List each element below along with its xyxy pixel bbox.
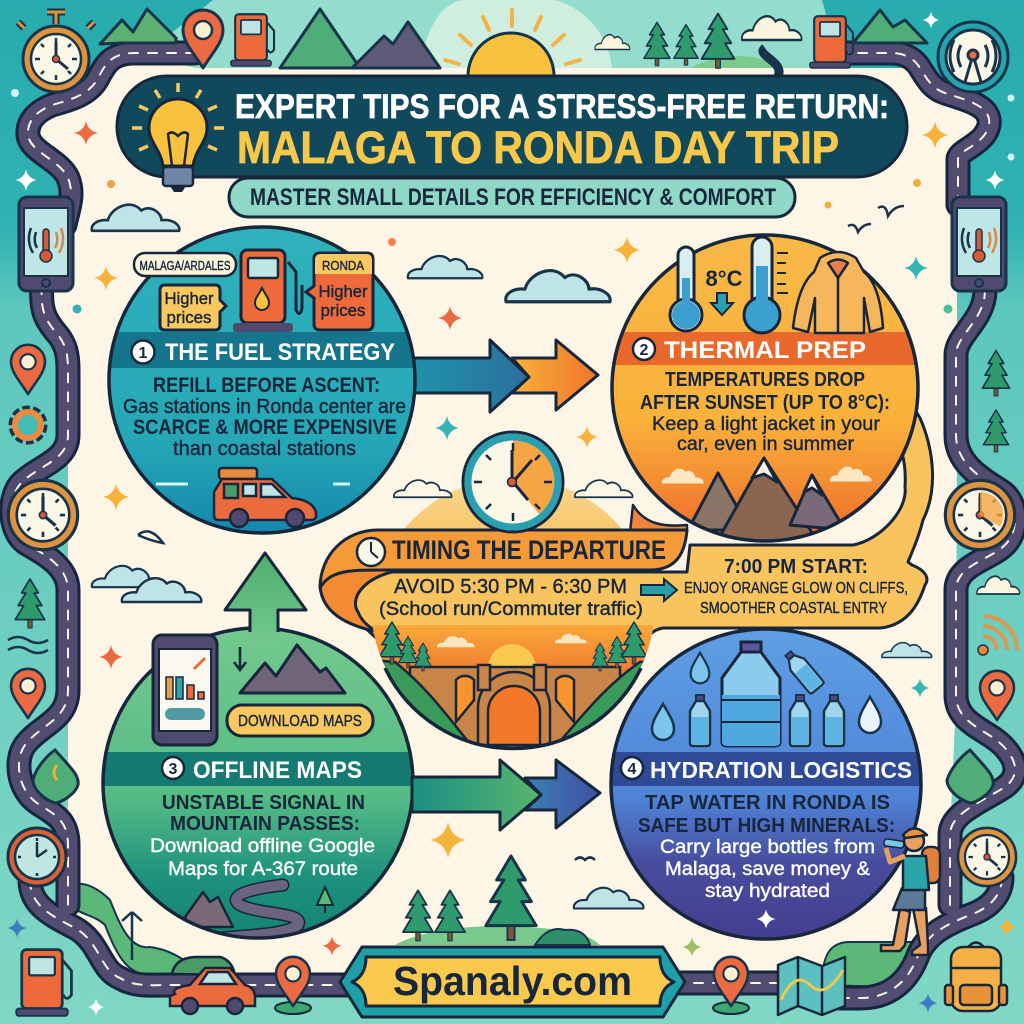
arrows: maps to hydration bbox=[412, 760, 600, 830]
icon: pin left lower bbox=[11, 669, 45, 718]
icon: clock right bbox=[945, 480, 1015, 550]
body text: car, even in summer bbox=[677, 434, 855, 455]
icon: small bottles and tilted bottle bbox=[690, 648, 844, 746]
download maps pill: DOWNLOAD MAPS bbox=[238, 713, 362, 730]
sky clouds bbox=[662, 467, 872, 484]
body text: REFILL BEFORE ASCENT: bbox=[153, 374, 380, 397]
body text bbox=[640, 369, 890, 455]
icon: large water jug bbox=[722, 642, 780, 746]
title banner bbox=[117, 76, 907, 192]
body text: TEMPERATURES DROP bbox=[665, 369, 865, 391]
mountains bbox=[688, 458, 845, 545]
start text: 7:00 PM START: bbox=[724, 556, 868, 578]
icon: waves left bbox=[8, 637, 48, 653]
body text: SAFE BUT HIGH MINERALS: bbox=[638, 815, 895, 837]
body text: TAP WATER IN RONDA IS bbox=[645, 792, 890, 814]
icon: clouds beside clock bbox=[394, 480, 633, 497]
clouds in scene bbox=[437, 634, 587, 647]
hiker bbox=[881, 828, 940, 955]
section band bbox=[90, 752, 430, 786]
icon: water drops bbox=[652, 653, 881, 740]
callout: Ronda higher prices: RONDA bbox=[322, 258, 364, 273]
icon: mountains top left bbox=[100, 9, 440, 68]
arrow bbox=[641, 579, 677, 601]
subtitle pill bbox=[229, 178, 795, 217]
icon: sun bbox=[445, 10, 580, 76]
icon: clock lower left bbox=[8, 828, 66, 886]
icon: stopwatch top left bbox=[18, 12, 94, 92]
body text: Gas stations in Ronda center are bbox=[123, 396, 406, 418]
icon: light bulb bbox=[132, 83, 224, 192]
icon: top trees bbox=[644, 14, 734, 68]
icon: signal tower bbox=[938, 22, 1008, 92]
icon: winding road bbox=[222, 885, 299, 938]
sun backdrop bbox=[371, 478, 655, 620]
body text: MOUNTAIN PASSES: bbox=[170, 813, 360, 835]
hiker legs bbox=[881, 908, 928, 955]
icon: fuel pump top left bbox=[231, 14, 274, 66]
arrows: fuel to thermal bbox=[410, 340, 598, 412]
download maps pill bbox=[227, 705, 373, 736]
icon: Ronda bridge bbox=[410, 665, 620, 749]
label: Malaga/Ardales bbox=[134, 253, 236, 276]
heading ribbon bbox=[320, 530, 687, 588]
icon: green hill behind trees bbox=[690, 56, 778, 68]
label: Malaga/Ardales: MALAGA/ARDALES bbox=[140, 258, 231, 273]
wind streaks bbox=[156, 482, 350, 486]
body text: stay hydrated bbox=[705, 881, 830, 902]
icon: bottom pin left bbox=[275, 957, 311, 1014]
icon: folded map bbox=[778, 957, 845, 1015]
number badge 3: 3 bbox=[169, 761, 178, 778]
icon: signal arcs right bbox=[978, 616, 1017, 655]
avoid text: AVOID 5:30 PM - 6:30 PM bbox=[394, 576, 627, 598]
arrow up to timing bbox=[225, 553, 306, 645]
number badge 4: 4 bbox=[628, 761, 637, 778]
title line 2: MALAGA TO RONDA DAY TRIP bbox=[237, 122, 839, 173]
icon: pin right bbox=[980, 671, 1014, 720]
trees bbox=[379, 622, 647, 671]
icon: gear left bbox=[12, 409, 44, 441]
brand banner bbox=[340, 947, 685, 1017]
scene lower outline bbox=[385, 668, 641, 749]
icon: phone with chart bbox=[153, 635, 217, 745]
callout: lower higher prices: Higher bbox=[164, 289, 214, 308]
number badge 2: 2 bbox=[640, 342, 649, 359]
icon: small clock bbox=[357, 538, 385, 566]
icon: small tree bbox=[317, 887, 333, 913]
panel: fuel strategy bbox=[100, 227, 430, 533]
heading ribbon curl bbox=[630, 505, 687, 532]
body text bbox=[150, 792, 375, 880]
8 degrees label: 8°C bbox=[706, 266, 743, 291]
hiker backpack bbox=[922, 847, 940, 883]
icon: large clock bbox=[463, 432, 563, 532]
icon: thermometers bbox=[670, 237, 788, 333]
body text: UNSTABLE SIGNAL IN bbox=[162, 792, 365, 814]
callout: Ronda higher prices bbox=[306, 253, 373, 330]
icon: hill left bbox=[33, 750, 78, 803]
icon: clock lower right bbox=[958, 828, 1016, 886]
icon: hill right bbox=[947, 750, 993, 803]
icon: map pin top bbox=[183, 10, 223, 68]
body text: Download offline Google bbox=[150, 836, 375, 857]
panel: hydration logistics bbox=[600, 629, 940, 939]
callout: lower higher prices: prices bbox=[166, 308, 212, 327]
number badge 2 bbox=[633, 338, 655, 360]
body text: Malaga, save money & bbox=[665, 859, 870, 880]
body text bbox=[123, 374, 406, 460]
icon: bottom pin right bbox=[713, 957, 749, 1014]
sun glow bbox=[420, 0, 612, 70]
number badge 1 bbox=[132, 340, 154, 364]
top border icons bbox=[100, 9, 1008, 92]
icon: pin left upper bbox=[11, 345, 45, 394]
icon: trees right bbox=[982, 350, 1010, 452]
wind turbine bbox=[122, 912, 142, 960]
icon: cloud right bbox=[977, 576, 1020, 594]
body text: SCARCE & MORE EXPENSIVE bbox=[133, 416, 397, 439]
body text: Keep a light jacket in your bbox=[652, 414, 881, 435]
icon: bottom car bbox=[170, 957, 255, 1014]
subtitle pill: MASTER SMALL DETAILS FOR EFFICIENCY & COMFORT bbox=[250, 184, 776, 211]
icon: jacket bbox=[793, 252, 883, 333]
avoid text: (School run/Commuter traffic) bbox=[379, 599, 643, 620]
body text: AFTER SUNSET (UP TO 8°C): bbox=[640, 392, 890, 414]
icon: clock left bbox=[8, 480, 78, 550]
section band bbox=[600, 752, 940, 786]
icon: fuel pump top right bbox=[810, 16, 853, 68]
panel: timing the departure bbox=[320, 405, 933, 755]
body text: than coastal stations bbox=[173, 438, 356, 460]
body text: Maps for A-367 route bbox=[168, 859, 358, 880]
body text: Carry large bottles from bbox=[660, 837, 875, 858]
heading: HYDRATION LOGISTICS bbox=[650, 757, 912, 783]
icon: phone right bbox=[952, 197, 1006, 291]
bottom scene: trees and hill bbox=[395, 856, 600, 945]
icon: small top clouds bbox=[595, 16, 802, 49]
yellow ribbon with swoosh tail bbox=[339, 405, 933, 650]
heading: TIMING THE DEPARTURE bbox=[392, 535, 666, 565]
top sky background bbox=[125, 0, 842, 70]
icon: backpack bbox=[945, 942, 1007, 1011]
8 degrees label bbox=[706, 266, 743, 315]
green cliffs bbox=[382, 660, 644, 740]
heading: THE FUEL STRATEGY bbox=[165, 339, 395, 366]
hill bottom left bbox=[70, 884, 205, 975]
number badge 3 bbox=[162, 757, 184, 779]
icon: red car bbox=[214, 468, 316, 527]
avoid text bbox=[379, 576, 643, 620]
body text bbox=[638, 792, 895, 902]
section band bbox=[600, 332, 930, 365]
start text: SMOOTHER COASTAL ENTRY bbox=[700, 600, 887, 617]
panel: thermal prep bbox=[600, 235, 930, 545]
icon: bottom fuel pump bbox=[16, 950, 71, 1016]
bridge scene bbox=[370, 622, 660, 755]
icon: small down arrow bbox=[234, 647, 246, 670]
icon: mountain bbox=[240, 645, 345, 693]
heading: OFFLINE MAPS bbox=[193, 757, 362, 784]
number badge 4 bbox=[621, 757, 643, 779]
start text: ENJOY ORANGE GLOW ON CLIFFS, bbox=[684, 580, 908, 597]
icon: tree left bbox=[15, 579, 45, 628]
icon: phone left bbox=[19, 197, 73, 291]
sparkle bbox=[756, 909, 776, 929]
number badge 1: 1 bbox=[139, 345, 148, 362]
brand text: Spanaly.com bbox=[393, 958, 632, 1004]
title line 1: EXPERT TIPS FOR A STRESS-FREE RETURN: bbox=[235, 88, 889, 126]
fuel pump bbox=[233, 250, 302, 332]
callout: Ronda higher prices: prices bbox=[320, 301, 366, 320]
start text bbox=[684, 556, 908, 617]
icon: small mountain bbox=[185, 892, 233, 927]
heading: THERMAL PREP bbox=[664, 337, 866, 364]
orange left fold of ribbon bbox=[320, 567, 400, 632]
panel: offline maps bbox=[90, 553, 430, 938]
icon: squiggle river bbox=[763, 48, 779, 76]
hill under hiker bbox=[822, 942, 914, 987]
callout: lower higher prices bbox=[160, 285, 226, 330]
callout: Ronda higher prices: Higher bbox=[318, 282, 368, 301]
icon: mountains top right bbox=[853, 10, 927, 43]
section band bbox=[100, 332, 430, 368]
